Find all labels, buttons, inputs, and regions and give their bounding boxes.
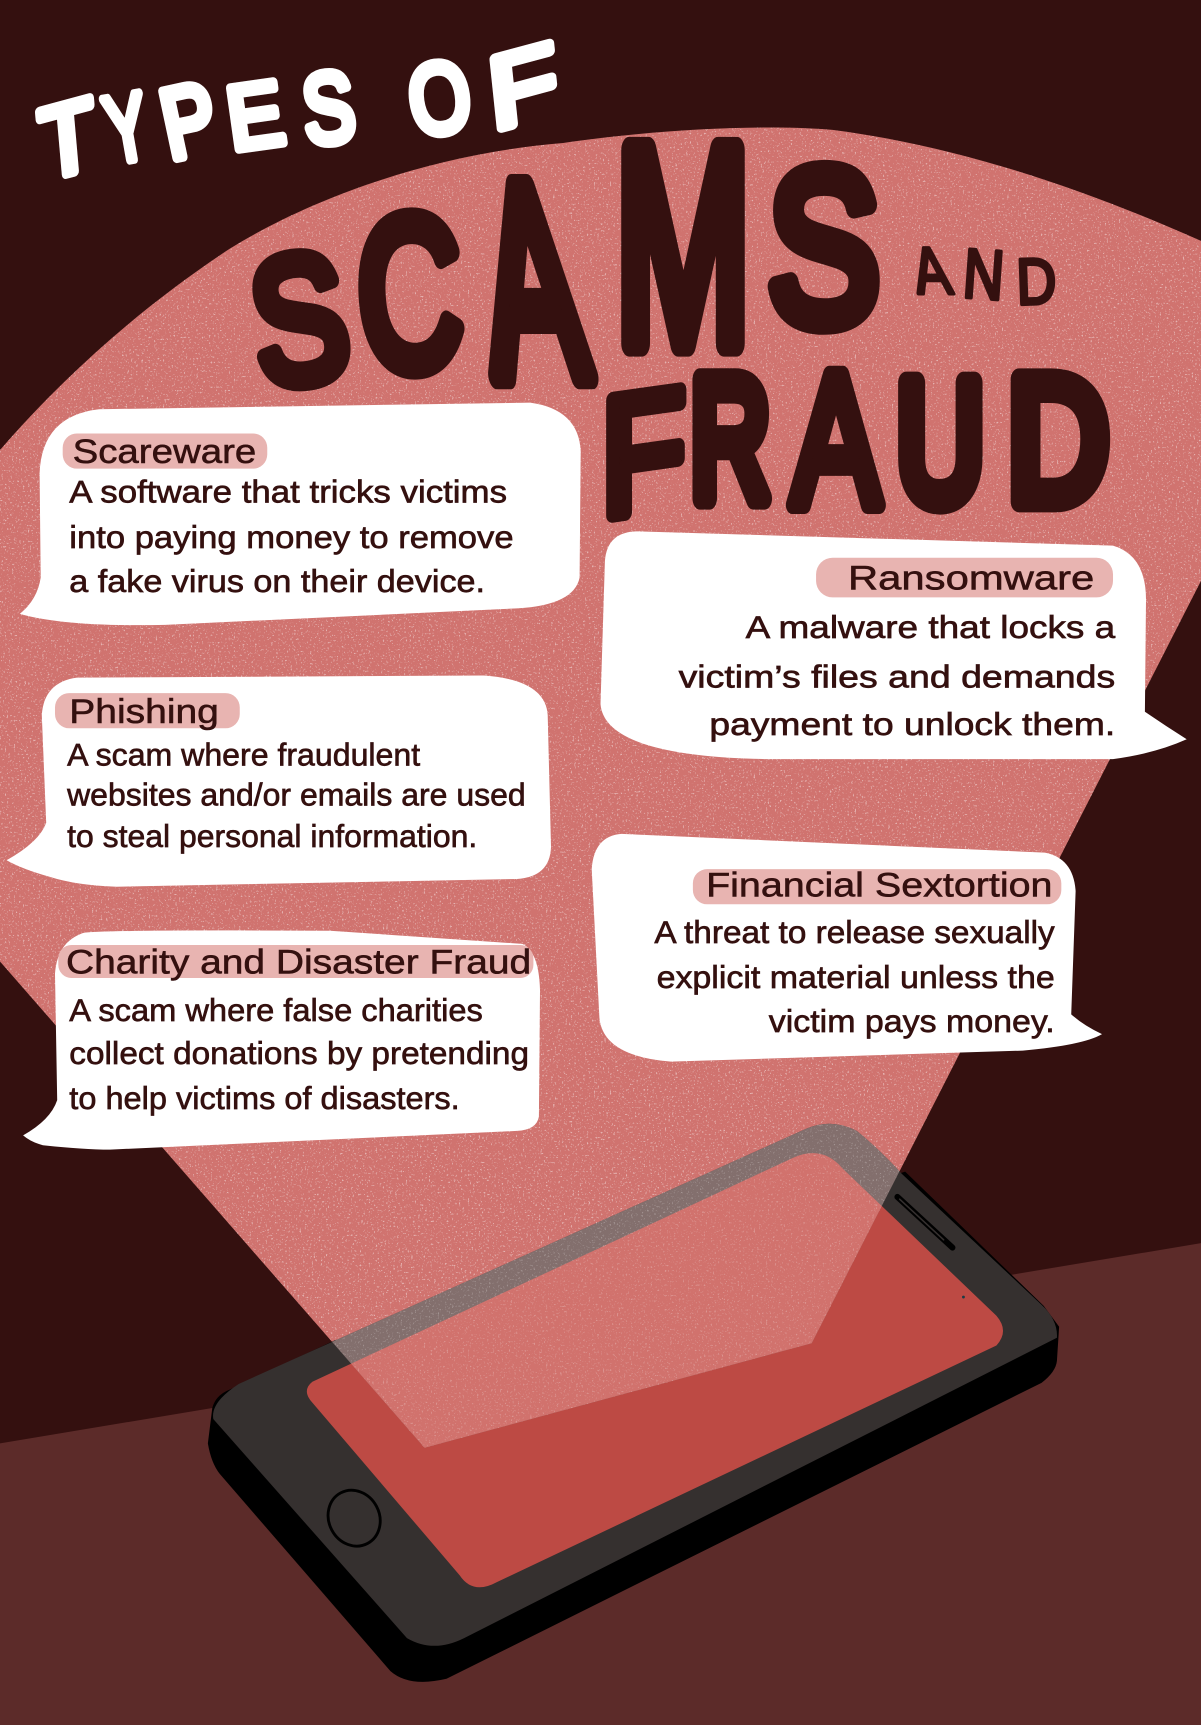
- title: and: N: [961, 235, 1007, 315]
- title: types of: P: [151, 61, 226, 180]
- description: [654, 914, 1055, 1039]
- description: A malware that locks a: [746, 609, 1116, 645]
- phone home button: [318, 1481, 390, 1555]
- heading: Scareware: [73, 433, 256, 471]
- heading: Ransomware: [848, 560, 1094, 598]
- title: scams: M: [616, 90, 750, 403]
- panel: charity and disaster fraud: [23, 930, 540, 1150]
- title: and: A: [905, 234, 957, 308]
- description: [679, 609, 1116, 742]
- description: victim’s files and demands: [679, 659, 1115, 695]
- heading highlight: [63, 433, 267, 469]
- title: types of: T: [36, 78, 99, 202]
- bubble: [23, 930, 540, 1150]
- description: A threat to release sexually: [654, 914, 1055, 950]
- description: [69, 474, 514, 599]
- description: A scam where false charities: [69, 992, 483, 1028]
- title: types of: E: [221, 62, 290, 170]
- heading highlight: [55, 693, 240, 728]
- description: [69, 992, 529, 1116]
- phone: [208, 1124, 1059, 1682]
- title: types of: Y: [97, 72, 156, 183]
- title: fraud: D: [1008, 340, 1108, 540]
- title: fraud: A: [792, 333, 880, 546]
- light beam from phone: [0, 128, 1201, 1342]
- bubble: [592, 834, 1102, 1062]
- heading: Financial Sextortion: [706, 867, 1053, 905]
- title: types of: S: [297, 50, 360, 166]
- title: scams: S: [239, 216, 360, 426]
- phone front face: [213, 1124, 1057, 1646]
- description: collect donations by pretending: [69, 1035, 529, 1071]
- bubble: [7, 675, 551, 887]
- heading highlight: [58, 945, 533, 978]
- panel: ransomware: [600, 531, 1187, 759]
- panel: phishing: [7, 675, 551, 887]
- beam over phone bezel: [332, 1124, 900, 1448]
- title: scams: A: [464, 128, 599, 435]
- screen dot: [962, 1296, 965, 1298]
- description: A scam where fraudulent: [67, 737, 420, 773]
- description: to steal personal information.: [67, 818, 477, 854]
- heading highlight: [693, 869, 1061, 904]
- title: scams: [239, 90, 880, 435]
- phone speaker: [897, 1197, 952, 1248]
- beam over phone screen: [351, 1153, 882, 1448]
- title: scams: S: [768, 126, 880, 369]
- heading: Charity and Disaster Fraud: [66, 944, 531, 982]
- description: into paying money to remove: [69, 519, 514, 555]
- phone screen: [307, 1153, 1003, 1587]
- description: A software that tricks victims: [69, 474, 507, 510]
- description: victim pays money.: [769, 1003, 1055, 1039]
- bubble: [20, 403, 581, 625]
- bubble: [600, 531, 1187, 759]
- heading: Phishing: [69, 693, 219, 731]
- title: types of: [36, 21, 563, 202]
- title: fraud: U: [897, 345, 984, 539]
- panel: scareware: [20, 403, 581, 625]
- phone side: [208, 1172, 1059, 1682]
- title: scams: C: [352, 171, 467, 416]
- panel: financial sextortion: [592, 834, 1102, 1062]
- table surface: [0, 1243, 1201, 1725]
- title: types of: O: [402, 39, 477, 157]
- description: explicit material unless the: [657, 959, 1055, 995]
- title: fraud: F: [601, 353, 685, 552]
- title: and: [905, 234, 1057, 318]
- title: types of: F: [484, 21, 563, 152]
- title: fraud: [601, 333, 1108, 552]
- description: [66, 737, 526, 854]
- heading highlight: [816, 558, 1113, 597]
- description: to help victims of disasters.: [69, 1080, 460, 1116]
- description: a fake virus on their device.: [69, 563, 485, 599]
- description: websites and/or emails are used: [66, 776, 526, 812]
- description: payment to unlock them.: [709, 706, 1115, 742]
- title: and: D: [1015, 245, 1057, 318]
- title: fraud: R: [691, 342, 770, 535]
